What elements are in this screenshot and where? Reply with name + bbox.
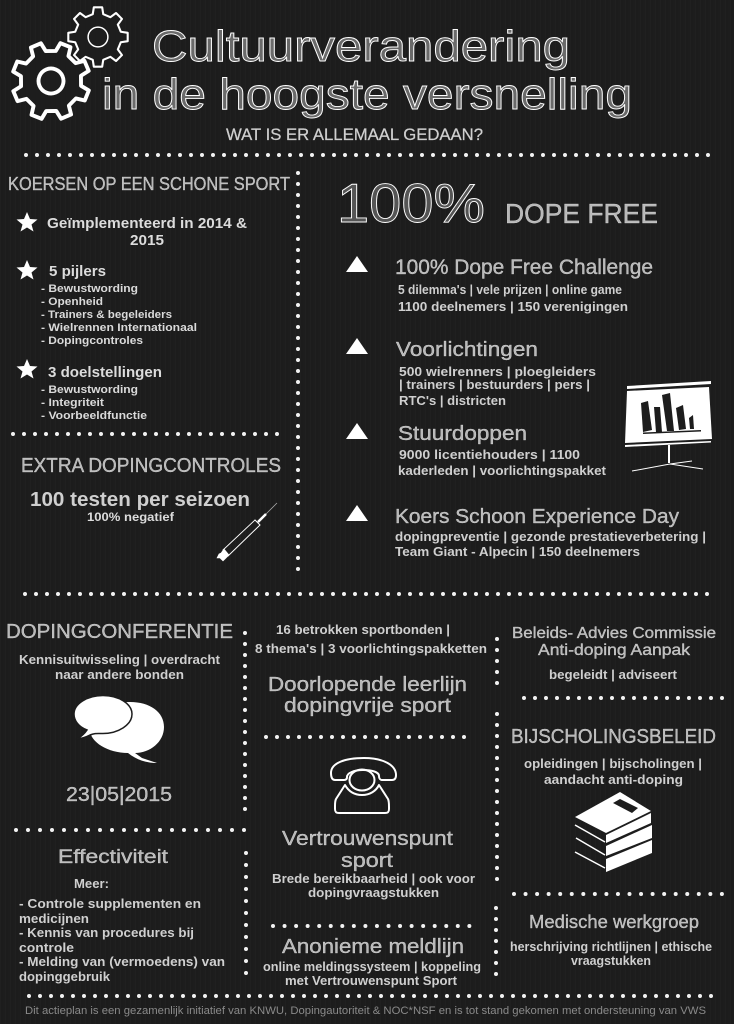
description: dopingvraagstukken — [308, 885, 439, 900]
icon: telephone — [331, 758, 396, 813]
panel: dopingconferentie — [6, 621, 233, 806]
icon: star — [16, 260, 38, 280]
text: 5 pijlers: - Trainers & begeleiders — [41, 309, 172, 321]
text: 5 pijlers: - Dopingcontroles — [41, 335, 143, 347]
heading — [268, 674, 467, 717]
panel: koersen op een schone sport — [8, 174, 290, 422]
item: experience day — [395, 506, 706, 559]
heading: 100%: 100% — [337, 172, 485, 234]
heading: Anonieme meldlijn — [282, 936, 464, 958]
text: 5 pijlers: - Wielrennen Internationaal — [41, 322, 197, 334]
stat: negative: 100% negatief — [87, 510, 175, 524]
description: vraagstukken — [571, 953, 651, 968]
description — [263, 959, 481, 988]
heading: Vertrouwenspunt — [282, 828, 453, 850]
panel: beleids- advies commissie — [512, 625, 716, 682]
text: 5 pijlers: - Bewustwording — [41, 283, 138, 295]
heading: EXTRA DOPINGCONTROLES — [21, 455, 281, 477]
icon: presentation board — [625, 381, 712, 471]
header: title block — [1, 7, 632, 144]
icon: star — [16, 212, 38, 232]
icon: triangle — [346, 423, 368, 439]
text: 5 pijlers: 5 pijlers — [49, 263, 106, 280]
heading: dope free: DOPE FREE — [505, 198, 658, 229]
item: challenge — [395, 256, 653, 314]
text: 3 doelstellingen: - Voorbeeldfunctie — [41, 410, 147, 422]
item: stuurdoppen: Stuurdoppen — [398, 423, 527, 445]
description — [524, 756, 702, 787]
list: dopinggebruik — [19, 969, 111, 984]
stats — [255, 622, 487, 656]
footer text: Dit actieplan is een gezamenlijk initiatief van KNWU, Dopingautoriteit & NOC*NSF en is tot stand gekomen met ondersteuning van VWS — [25, 1005, 706, 1017]
heading — [512, 625, 716, 659]
description: Kennisuitwisseling | overdracht — [19, 652, 221, 667]
description: opleidingen | bijscholingen | — [524, 756, 702, 771]
heading: sport — [341, 850, 394, 872]
date: 23|05|2015 — [66, 784, 172, 806]
icon: star — [16, 359, 38, 378]
description — [272, 871, 475, 900]
item: stuurdoppen: 9000 licentiehouders | 1100 — [399, 447, 580, 462]
icon: triangle — [346, 256, 368, 272]
title: in de hoogste versnelling — [102, 70, 632, 119]
text: 3 doelstellingen: - Bewustwording — [41, 384, 138, 396]
item: experience day: Team Giant - Alpecin | 150 deelnemers — [395, 544, 640, 559]
item: challenge: 100% Dope Free Challenge — [395, 256, 653, 279]
icon: large gear — [1, 31, 101, 131]
text: 3 doelstellingen — [41, 364, 162, 422]
panel: medische werkgroep — [510, 912, 712, 968]
heading: Effectiviteit — [58, 847, 169, 868]
item: experience day: Koers Schoon Experience Day — [395, 506, 679, 528]
panel: 100% dope free — [337, 172, 712, 559]
icon: stack of books — [575, 792, 652, 872]
description: Brede bereikbaarheid | ook voor — [272, 871, 475, 886]
item: challenge: 5 dilemma's | vele prijzen | online game — [398, 282, 622, 297]
panel: doorlopende leerlijn — [255, 622, 487, 717]
item: voorlichtingen — [396, 339, 596, 408]
list — [19, 876, 225, 984]
heading: BIJSCHOLINGSBELEID — [511, 726, 716, 748]
description — [510, 939, 712, 968]
description: online meldingssysteem | koppeling — [263, 959, 481, 974]
panel: anonieme meldlijn — [263, 936, 481, 988]
list: - Controle supplementen en — [19, 896, 201, 911]
heading: Anti-doping Aanpak — [538, 642, 691, 659]
panel: bijscholingsbeleid — [511, 726, 716, 872]
heading: Medische werkgroep — [529, 912, 699, 932]
title — [102, 22, 632, 119]
panel: extra dopingcontroles — [21, 455, 281, 561]
icon: syringe — [217, 503, 277, 561]
list: controle — [19, 940, 74, 955]
text: 3 doelstellingen: 3 doelstellingen — [48, 364, 162, 381]
heading — [282, 828, 453, 872]
panel: effectiviteit — [19, 847, 225, 984]
list: Meer: — [74, 876, 109, 891]
item: voorlichtingen: | trainers | bestuurders | pers | — [399, 377, 590, 392]
heading: Doorlopende leerlijn — [268, 674, 467, 696]
stats: 16 betrokken sportbonden | — [276, 622, 450, 637]
icon: triangle — [346, 338, 368, 354]
description: begeleidt | adviseert — [549, 667, 678, 682]
item: voorlichtingen: RTC's | districten — [399, 393, 506, 408]
subtitle: WAT IS ER ALLEMAAL GEDAAN? — [226, 125, 483, 144]
icon: small gear — [68, 7, 128, 67]
list: medicijnen — [19, 911, 89, 926]
description — [19, 652, 221, 682]
heading: dopingvrije sport — [284, 695, 452, 717]
description: naar andere bonden — [55, 667, 184, 682]
list: - Kennis van procedures bij — [19, 925, 194, 940]
icon: triangle — [346, 505, 368, 521]
item: challenge: 1100 deelnemers | 150 verenigingen — [398, 299, 628, 314]
description: met Vertrouwenspunt Sport — [285, 973, 458, 988]
description: herschrijving richtlijnen | ethische — [510, 939, 712, 954]
text: implemented: 2015 — [130, 232, 164, 249]
stats: 8 thema's | 3 voorlichtingspakketten — [255, 641, 487, 656]
heading: Beleids- Advies Commissie — [512, 625, 716, 642]
description: aandacht anti-doping — [544, 772, 683, 787]
text: 5 pijlers: - Openheid — [41, 296, 103, 308]
heading: KOERSEN OP EEN SCHONE SPORT — [8, 174, 290, 194]
text: implemented: Geïmplementeerd in 2014 & — [47, 215, 247, 232]
item: stuurdoppen — [398, 423, 607, 478]
heading: DOPINGCONFERENTIE — [6, 621, 233, 643]
text: 3 doelstellingen: - Integriteit — [41, 397, 104, 409]
item: voorlichtingen: 500 wielrenners | ploegleiders — [399, 364, 596, 379]
item: experience day: dopingpreventie | gezonde prestatieverbetering | — [395, 529, 706, 544]
panel: vertrouwenspunt sport — [272, 758, 475, 900]
list: - Melding van (vermoedens) van — [19, 954, 225, 969]
item: voorlichtingen: Voorlichtingen — [396, 339, 538, 361]
stat: 100 tests: 100 testen per seizoen — [30, 489, 250, 511]
title: Cultuurverandering — [152, 22, 570, 71]
icon: speech bubbles — [74, 696, 164, 763]
text: implemented — [47, 215, 247, 249]
item: stuurdoppen: kaderleden | voorlichtingspakket — [398, 463, 607, 478]
text: 5 pijlers — [41, 263, 197, 347]
